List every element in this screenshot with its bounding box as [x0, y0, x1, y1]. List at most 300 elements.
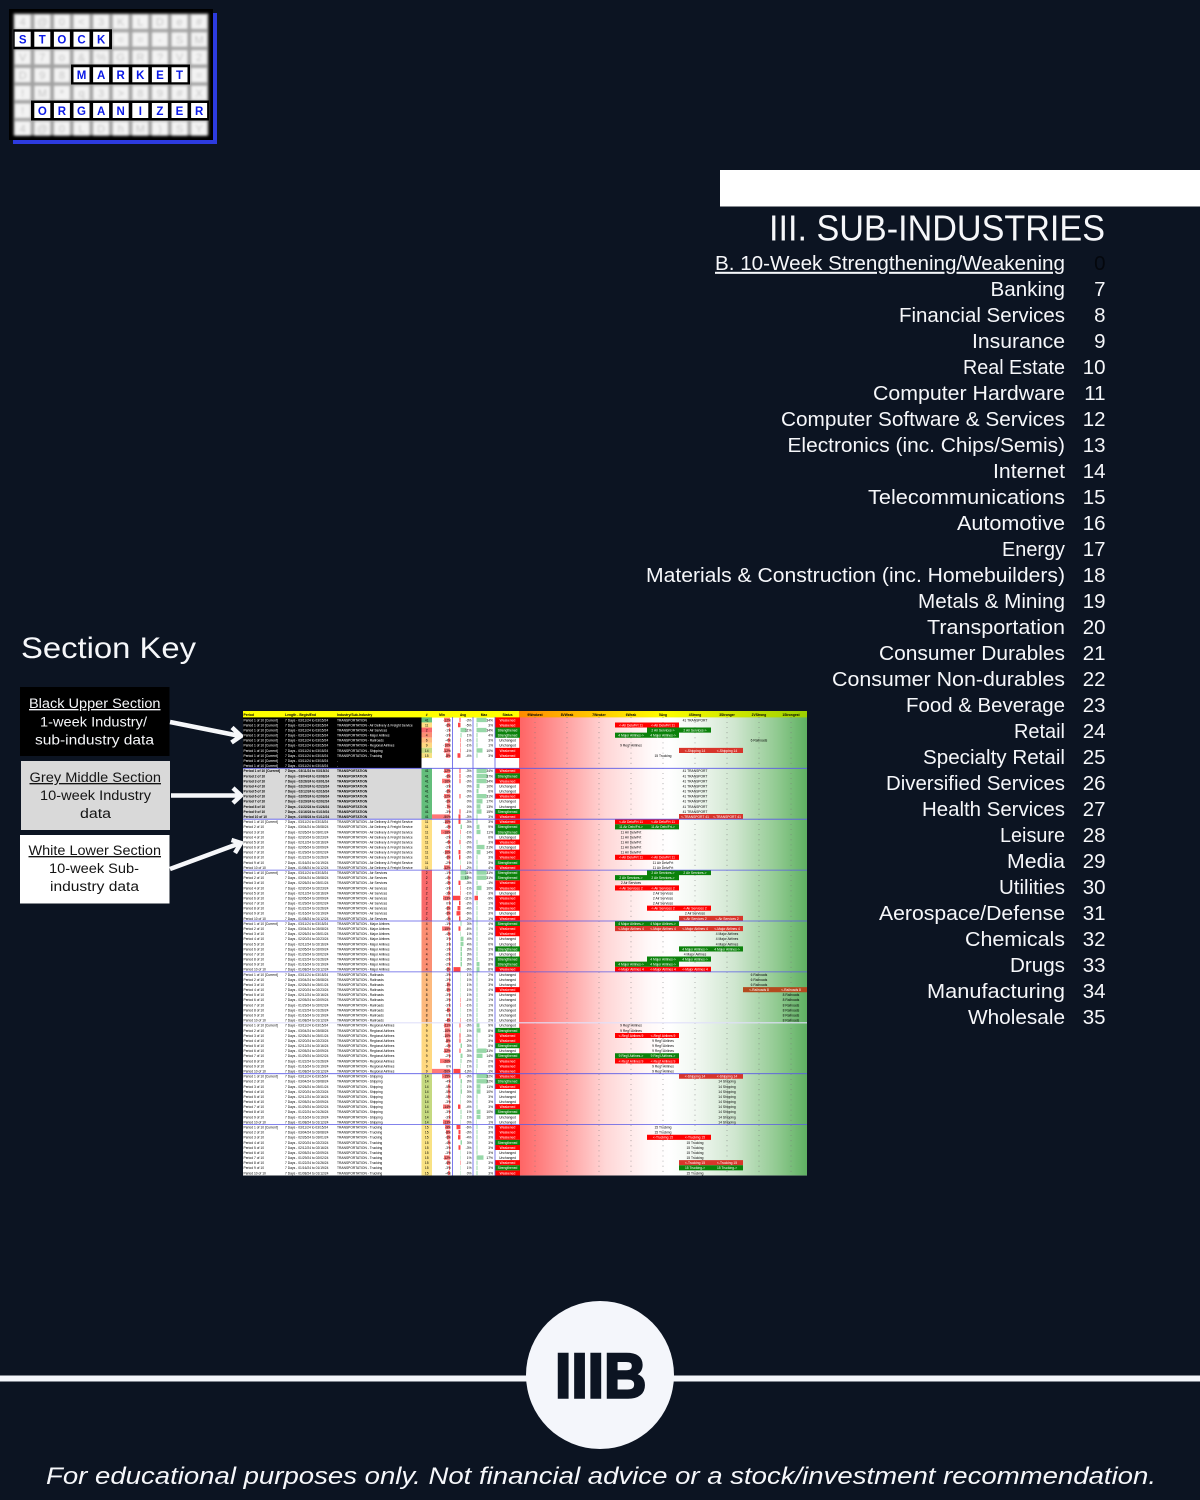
- section: grey middle, 10-week industry data: -6%: [445, 800, 451, 804]
- section: air services: Period 4 of 10: [244, 886, 264, 890]
- section: trucking: Period 3 of 10: [244, 1136, 264, 1140]
- section: black upper, 1-week data: 14: [425, 749, 429, 753]
- section: black upper, 1-week data: -1%: [466, 749, 472, 753]
- section: trucking: Strengthened: [498, 1141, 518, 1145]
- section: air services: TRANSPORTATION - Air Services: [337, 917, 388, 921]
- section: regional airlines: -1%: [487, 1069, 493, 1073]
- section: major airlines: Strengthened: [498, 958, 518, 962]
- table of contents list: Drugs: [1010, 954, 1065, 977]
- section: trucking: Period 1 of 10 [Current]: [244, 1125, 278, 1129]
- section: major airlines: 7 Days - 01/22/24 to 01/26/24: [285, 958, 329, 962]
- section: air services: -4%: [466, 907, 472, 911]
- section: regional airlines: TRANSPORTATION - Regional Airlines: [337, 1029, 395, 1033]
- table of contents list: 8: [1094, 304, 1106, 327]
- section: grey middle, 10-week industry data: TRANSPORTATION: [337, 815, 368, 819]
- section: grey middle, 10-week industry data: TRANSPORTATION: [337, 795, 368, 799]
- section: shipping: 7 Days - 02/26/24 to 03/01/24: [285, 1085, 329, 1089]
- section: major airlines: TRANSPORTATION - Major Airlines: [337, 932, 390, 936]
- section: regional airlines: 9: [426, 1049, 428, 1053]
- section: railroads: 1%: [467, 973, 472, 977]
- section: grey middle, 10-week industry data: Unchanged: [499, 790, 516, 794]
- section: regional airlines: 9: [426, 1059, 428, 1063]
- section: black upper, 1-week data: 41: [425, 718, 429, 722]
- section: grey middle, 10-week industry data: Unchanged: [499, 805, 516, 809]
- section: major airlines: 7 Days - 03/04/24 to 03/08/24: [285, 927, 329, 931]
- section: air delivery and freight: TRANSPORTATION - Air Delivery & Freight Service: [337, 830, 413, 834]
- section: trucking: 15: [425, 1131, 429, 1135]
- section: railroads: Period 9 of 10: [244, 1014, 264, 1018]
- section: railroads: Weakened: [500, 988, 516, 992]
- section: shipping: Period 6 of 10: [244, 1100, 264, 1104]
- section: black upper, 1-week data: 7 Days - 03/11/24 to 03/15/24: [285, 759, 328, 763]
- section: major airlines: TRANSPORTATION - Major Airlines: [337, 942, 390, 946]
- section: major airlines: 4 Major Airlines->: [650, 958, 676, 962]
- section: regional airlines: 7 Days - 03/04/24 to 03/08/24: [285, 1029, 329, 1033]
- section: railroads: TRANSPORTATION - Railroads: [337, 1003, 384, 1007]
- section: major airlines: 4: [426, 968, 428, 972]
- section: grey middle, 10-week industry data: 10%: [486, 784, 493, 788]
- section: grey middle, 10-week industry data: TRANSPORTATION: [337, 769, 368, 773]
- section: air delivery and freight: 3%: [467, 825, 472, 829]
- section: shipping: 0%: [467, 1100, 472, 1104]
- section: air services: Period 8 of 10: [244, 907, 264, 911]
- section: black upper, 1-week data: 2 Air Services->: [683, 729, 707, 733]
- section: railroads: 6: [426, 983, 428, 987]
- section: regional airlines: -3%: [466, 1024, 472, 1028]
- section: trucking: -8%: [445, 1131, 451, 1135]
- section: air services: 7 Days - 01/29/24 to 02/02/24: [285, 902, 329, 906]
- section: trucking: 1%: [467, 1166, 472, 1170]
- section: air services: <-Air Services 2: [651, 886, 675, 890]
- section: major airlines: Period 4 of 10: [244, 937, 264, 941]
- section: trucking: Weakened: [500, 1136, 516, 1140]
- table of contents list: Banking: [990, 278, 1065, 301]
- section: air delivery and freight: Period 10 of 10: [244, 866, 266, 870]
- section: trucking: TRANSPORTATION - Trucking: [337, 1136, 382, 1140]
- section: major airlines: 4 Major Airlines: [716, 937, 739, 941]
- section: shipping: 14 Shipping: [718, 1095, 736, 1099]
- section: major airlines: Unchanged: [499, 952, 516, 956]
- section: grey middle, 10-week industry data: -3%: [466, 815, 472, 819]
- section: railroads: 2%: [488, 1008, 493, 1012]
- section: air services: <-Air Services 2: [651, 907, 675, 911]
- section: trucking: 17%: [486, 1156, 493, 1160]
- table header row: 2VStrong: [752, 713, 766, 717]
- section: air delivery and freight: 7 Days - 01/08/24 to 01/12/24: [285, 866, 329, 870]
- section: air services: Period 5 of 10: [244, 891, 264, 895]
- section: air services: -2%: [466, 902, 472, 906]
- section: major airlines: <-Major Airlines 4: [618, 927, 644, 931]
- section: air services: 0%: [446, 902, 451, 906]
- section: major airlines: Period 5 of 10: [244, 942, 264, 946]
- section: regional airlines: TRANSPORTATION - Regional Airlines: [337, 1054, 395, 1058]
- section: trucking: 1%: [467, 1151, 472, 1155]
- section: black upper, 1-week data: Strengthened: [498, 734, 518, 738]
- section: railroads: -3%: [445, 973, 451, 977]
- section: major airlines: 4 Major Airlines->: [714, 947, 740, 951]
- section: air delivery and freight: Weakened: [500, 866, 516, 870]
- table header row: Max: [481, 713, 487, 717]
- section: black upper, 1-week data: Period 1 of 10 [Current]: [244, 734, 278, 738]
- section: regional airlines: 7 Days - 02/12/24 to 02/16/24: [285, 1044, 329, 1048]
- section: grey middle, 10-week industry data: TRANSPORTATION: [337, 779, 368, 783]
- section: grey middle, 10-week industry data: 7 Days - 02/05/24 to 02/09/24: [285, 795, 329, 799]
- section: air delivery and freight: 7 Days - 02/12/24 to 02/16/24: [285, 840, 329, 844]
- section: major airlines: 4 Major Airlines->: [618, 963, 644, 967]
- section: shipping: 14: [425, 1100, 429, 1104]
- section: grey middle, 10-week industry data: -3%: [466, 774, 472, 778]
- section: railroads: 7 Days - 02/12/24 to 02/16/24: [285, 993, 329, 997]
- section: air delivery and freight: -3%: [466, 856, 472, 860]
- section: railroads: Unchanged: [499, 1003, 516, 1007]
- section: major airlines: TRANSPORTATION - Major Airlines: [337, 963, 390, 967]
- section: railroads: 7 Days - 01/16/24 to 01/19/24: [285, 1014, 329, 1018]
- table of contents list: Leisure: [1000, 824, 1065, 847]
- section: major airlines: 3%: [467, 963, 472, 967]
- section: railroads: -3%: [445, 998, 451, 1002]
- section: shipping: TRANSPORTATION - Shipping: [337, 1110, 383, 1114]
- section: air delivery and freight: 11: [425, 835, 429, 839]
- table header row: Period: [244, 713, 254, 717]
- section: air services: TRANSPORTATION - Air Services: [337, 907, 388, 911]
- section: air services: 7 Days - 01/08/24 to 01/12/24: [285, 917, 329, 921]
- section: regional airlines: 3%: [488, 1039, 493, 1043]
- section: trucking: TRANSPORTATION - Trucking: [337, 1171, 382, 1175]
- section: air delivery and freight: Period 2 of 10: [244, 825, 264, 829]
- section: air delivery and freight: 11 Air Delv/Frt: [621, 846, 641, 850]
- section: trucking: 15: [425, 1141, 429, 1145]
- table header row: Avg: [460, 713, 466, 717]
- section: trucking: TRANSPORTATION - Trucking: [337, 1131, 382, 1135]
- section: shipping: Period 5 of 10: [244, 1095, 264, 1099]
- table of contents list: B. 10-Week Strengthening/Weakening: [715, 252, 1065, 275]
- section: air services: 3%: [488, 891, 493, 895]
- section: black upper, 1-week data: TRANSPORTATION - Regional Airlines: [337, 744, 395, 748]
- section: grey middle, 10-week industry data: 7 Days - 01/29/24 to 02/02/24: [285, 800, 329, 804]
- section: shipping: Strengthened: [498, 1110, 518, 1114]
- section: railroads: 7 Days - 02/20/24 to 02/23/24: [285, 988, 329, 992]
- section: regional airlines: Unchanged: [499, 1024, 516, 1028]
- section: regional airlines: TRANSPORTATION - Regional Airlines: [337, 1059, 395, 1063]
- section: air delivery and freight: 21%: [486, 846, 493, 850]
- section: regional airlines: 9: [426, 1039, 428, 1043]
- section: trucking: 7 Days - 01/29/24 to 02/02/24: [285, 1156, 329, 1160]
- section: black upper, 1-week data: Period 1 of 10 [Current]: [244, 749, 278, 753]
- section: air delivery and freight: Strengthened: [498, 861, 518, 865]
- section: shipping: -3%: [445, 1115, 451, 1119]
- table of contents list: Insurance: [972, 330, 1065, 353]
- section: shipping: 1%: [467, 1085, 472, 1089]
- section: air delivery and freight: 11: [425, 856, 429, 860]
- table of contents list: Diversified Services: [886, 772, 1065, 795]
- section: major airlines: 4 Major Airlines->: [650, 922, 676, 926]
- section: railroads: -1%: [466, 1019, 472, 1023]
- section: air services: -1%: [487, 881, 493, 885]
- section: trucking: Weakened: [500, 1171, 516, 1175]
- section: major airlines: <-Major Airlines 4: [682, 968, 708, 972]
- section: major airlines: 8%: [488, 963, 493, 967]
- section: regional airlines: 7 Days - 03/11/24 to 03/15/24: [285, 1024, 328, 1028]
- section: major airlines: -1%: [445, 947, 451, 951]
- arrow: white section to table: [170, 840, 241, 869]
- section: railroads: Unchanged: [499, 998, 516, 1002]
- section: black upper, 1-week data: Period 1 of 10 [Current]: [244, 723, 278, 727]
- section: regional airlines: 9: [426, 1029, 428, 1033]
- section: trucking: Period 6 of 10: [244, 1151, 264, 1155]
- table of contents list: Financial Services: [899, 304, 1065, 327]
- section: air services: Weakened: [500, 901, 516, 905]
- section: trucking: TRANSPORTATION - Trucking: [337, 1141, 382, 1145]
- section: trucking: [244, 1125, 743, 1176]
- section: black upper, 1-week data: -3%: [466, 718, 472, 722]
- section: black upper, 1-week data: 9 Reg'l Airlines: [620, 744, 642, 748]
- section: major airlines: Period 6 of 10: [244, 947, 264, 951]
- section: trucking: TRANSPORTATION - Trucking: [337, 1161, 382, 1165]
- section: regional airlines: 14%: [486, 1054, 493, 1058]
- section: air delivery and freight: Weakened: [500, 856, 516, 860]
- section: major airlines: 7 Days - 01/16/24 to 01/19/24: [285, 963, 329, 967]
- section: black upper, 1-week data: <-Air Delv/Frt 11: [651, 723, 675, 727]
- section: major airlines: <-Major Airlines 4: [650, 968, 676, 972]
- table header row: #: [426, 713, 428, 717]
- arrow: black section to table: [170, 722, 241, 742]
- section: trucking: 15: [425, 1125, 429, 1129]
- table header row: 1Strongest: [782, 713, 801, 717]
- section: shipping: 14: [425, 1085, 429, 1089]
- table of contents list: Energy: [1002, 538, 1066, 561]
- table of contents list: Real Estate: [963, 356, 1065, 379]
- section: trucking: -3%: [445, 1166, 451, 1170]
- section: railroads: -3%: [445, 993, 451, 997]
- section: railroads: -1%: [466, 1003, 472, 1007]
- section: shipping: 3%: [488, 1095, 493, 1099]
- section: air services: 2: [426, 871, 428, 875]
- section: major airlines: 4: [426, 947, 428, 951]
- section: shipping: -3%: [466, 1075, 472, 1079]
- section: major airlines: 4%: [488, 922, 493, 926]
- section: shipping: Weakened: [500, 1105, 516, 1109]
- section: grey middle, 10-week industry data: 41 TRANSPORT: [683, 769, 707, 773]
- section: air delivery and freight: 0%: [467, 835, 472, 839]
- section: major airlines: 4%: [467, 937, 472, 941]
- section: air delivery and freight: 11 Air Delv/Frt: [621, 830, 641, 834]
- section: railroads: Period 1 of 10 [Current]: [244, 973, 278, 977]
- section: regional airlines: 9 Reg'l Airlines: [652, 1049, 674, 1053]
- table of contents list: 22: [1083, 668, 1106, 691]
- key box: grey middle section: Grey Middle Section: [30, 770, 161, 785]
- section: shipping: 0%: [467, 1095, 472, 1099]
- section: major airlines: -9%: [466, 968, 472, 972]
- table of contents list: 29: [1083, 850, 1106, 873]
- section: air delivery and freight: <-Air Delv/Frt 11: [619, 856, 643, 860]
- section: black upper, 1-week data: Unchanged: [499, 739, 516, 743]
- heading: Section Key: Section Key: [21, 632, 196, 665]
- section: major airlines: 4: [426, 963, 428, 967]
- section: railroads: 3%: [488, 983, 493, 987]
- section: major airlines: 3%: [488, 947, 493, 951]
- section: air delivery and freight: Weakened: [500, 820, 516, 824]
- section: railroads: TRANSPORTATION - Railroads: [337, 1008, 384, 1012]
- table of contents list: 13: [1083, 434, 1106, 457]
- section: major airlines: 7 Days - 01/08/24 to 01/12/24: [285, 968, 329, 972]
- section: railroads: -4%: [445, 1019, 451, 1023]
- section: black upper, 1-week data: <-Shipping 14: [717, 749, 737, 753]
- table of contents list: 16: [1083, 512, 1106, 535]
- section: grey middle, 10-week industry data: -1%: [466, 810, 472, 814]
- section: air services: 2: [426, 876, 428, 880]
- section: shipping: Unchanged: [499, 1100, 516, 1104]
- section: major airlines: Period 8 of 10: [244, 958, 264, 962]
- section: shipping: 1%: [488, 1120, 493, 1124]
- section: black upper, 1-week data: 4%: [488, 734, 493, 738]
- section: railroads: Unchanged: [499, 1019, 516, 1023]
- section: major airlines: 3%: [446, 937, 451, 941]
- section: air services: 2%: [488, 907, 493, 911]
- section: black upper, 1-week data: -1%: [466, 744, 472, 748]
- key box: black upper section: 1-week Industry/: [40, 714, 147, 730]
- table of contents list: 23: [1083, 694, 1106, 717]
- section: regional airlines: Period 10 of 10: [244, 1069, 266, 1073]
- section: major airlines: 7 Days - 02/20/24 to 02/23/24: [285, 937, 329, 941]
- section: air services: 2: [426, 896, 428, 900]
- section: air services: 2: [426, 881, 428, 885]
- section: air delivery and freight: Period 8 of 10: [244, 856, 264, 860]
- section: black upper, 1-week data: <-Air Delv/Frt 11: [619, 723, 643, 727]
- section: trucking: 7 Days - 01/08/24 to 01/12/24: [285, 1171, 329, 1175]
- section: shipping: 14 Shipping: [718, 1085, 736, 1089]
- logo: Stock Market Organizer: STOCK: [19, 34, 106, 46]
- section: air delivery and freight: 11 Air Delv/Frt->: [651, 825, 675, 829]
- section: regional airlines: 0%: [446, 1064, 451, 1068]
- section: trucking: -4%: [445, 1171, 451, 1175]
- section: grey middle, 10-week industry data: Period 8 of 10: [244, 805, 265, 809]
- table of contents list: Utilities: [999, 876, 1065, 899]
- section: trucking: 3%: [488, 1146, 493, 1150]
- section: regional airlines: 9 Reg'l Airlines: [652, 1039, 674, 1043]
- section: air services: 7 Days - 01/16/24 to 01/19/24: [285, 912, 329, 916]
- table of contents list: 11: [1084, 382, 1106, 405]
- table header row: 5Avg: [659, 713, 667, 717]
- section: major airlines: Strengthened: [498, 922, 518, 926]
- section: grey middle, 10-week industry data: 7 Days - 02/12/24 to 02/16/24: [285, 790, 329, 794]
- section: railroads: -1%: [466, 998, 472, 1002]
- section: air services: -1%: [466, 886, 472, 890]
- section: air services: 7 Days - 02/05/24 to 02/09/24: [285, 896, 329, 900]
- section: regional airlines: 9: [426, 1034, 428, 1038]
- section: major airlines: TRANSPORTATION - Major Airlines: [337, 958, 390, 962]
- section: major airlines: Period 1 of 10 [Current]: [244, 922, 278, 926]
- section: railroads: <-Railroads 8: [749, 988, 769, 992]
- section: major airlines: 4 Major Airlines->: [682, 947, 708, 951]
- section: air delivery and freight: -2%: [445, 846, 451, 850]
- section: trucking: 15 Trucking->: [717, 1166, 737, 1170]
- section: grey middle, 10-week industry data: TRANSPORTATION: [337, 774, 368, 778]
- section: shipping: 14 Shipping: [718, 1100, 736, 1104]
- section: railroads: 8 Railroads: [783, 998, 800, 1002]
- section: air delivery and freight: -18%: [443, 830, 451, 834]
- section: major airlines: 3%: [467, 958, 472, 962]
- table of contents list: 17: [1083, 538, 1106, 561]
- section: regional airlines: 3%: [467, 1044, 472, 1048]
- section: trucking: <-Trucking 15: [653, 1136, 673, 1140]
- section: grey middle, 10-week industry data: Strengthened: [498, 774, 518, 778]
- table header row: 6Weak: [626, 713, 636, 717]
- section: regional airlines: -11%: [444, 1024, 451, 1028]
- section: grey middle, 10-week industry data: TRANSPORTATION: [337, 810, 368, 814]
- section: trucking: Period 7 of 10: [244, 1156, 264, 1160]
- section: air services: 3%: [488, 912, 493, 916]
- table of contents list: Computer Software & Services: [781, 408, 1065, 431]
- section: major airlines: 4: [426, 942, 428, 946]
- section: black upper, 1-week data: 3%: [488, 754, 493, 758]
- section: black upper, 1-week data: 1%: [488, 744, 493, 748]
- section: shipping: Period 10 of 10: [244, 1120, 266, 1124]
- section: black upper, 1-week data: 7 Days - 03/11/24 to 03/15/24: [285, 739, 328, 743]
- section: railroads: 6: [426, 988, 428, 992]
- section: major airlines: TRANSPORTATION - Major Airlines: [337, 952, 390, 956]
- section: shipping: 7 Days - 02/12/24 to 02/16/24: [285, 1095, 329, 1099]
- section: air services: Weakened: [500, 917, 516, 921]
- section: regional airlines: 1%: [467, 1029, 472, 1033]
- section: air delivery and freight: 9%: [488, 825, 493, 829]
- section: trucking: 3%: [488, 1151, 493, 1155]
- section: grey middle, 10-week industry data: 15%: [486, 810, 493, 814]
- section: major airlines: 3%: [467, 952, 472, 956]
- section: air services: Weakened: [500, 886, 516, 890]
- table header row: Status: [502, 713, 513, 717]
- section: shipping: -13%: [443, 1120, 451, 1124]
- section: trucking: Unchanged: [499, 1151, 516, 1155]
- section: air services: <-Air Services 2: [619, 886, 643, 890]
- section: air delivery and freight: 11: [425, 820, 429, 824]
- section: railroads: 8 Railroads: [783, 1014, 800, 1018]
- table of contents list: 24: [1083, 720, 1106, 743]
- section: railroads: Period 10 of 10: [244, 1019, 266, 1023]
- section: grey middle, 10-week industry data: 41 TRANSPORT: [683, 790, 707, 794]
- section: black upper, 1-week data: TRANSPORTATION - Air Delivery & Freight Service: [337, 723, 413, 727]
- section: shipping: 32%: [486, 1080, 493, 1084]
- section: regional airlines: 3%: [467, 1054, 472, 1058]
- table of contents list: 19: [1083, 590, 1106, 613]
- section: air services: <-Air Services 2: [683, 917, 707, 921]
- key box: grey middle section: [21, 761, 170, 830]
- section: major airlines: -2%: [445, 952, 451, 956]
- section: railroads: 1%: [467, 1008, 472, 1012]
- section: black upper, 1-week data: -10%: [443, 744, 451, 748]
- section: air services: 10%: [486, 886, 493, 890]
- section: shipping: <-Shipping 14: [717, 1075, 737, 1079]
- section: regional airlines: TRANSPORTATION - Regional Airlines: [337, 1069, 395, 1073]
- section: railroads: 1%: [488, 998, 493, 1002]
- section: black upper, 1-week data: -3%: [445, 734, 451, 738]
- logo: Stock Market Organizer: ORGANIZER: [38, 106, 204, 118]
- section: grey middle, 10-week industry data: TRANSPORTATION: [337, 784, 368, 788]
- section: trucking: TRANSPORTATION - Trucking: [337, 1156, 382, 1160]
- section: air delivery and freight: Strengthened: [498, 830, 518, 834]
- section: trucking: TRANSPORTATION - Trucking: [337, 1146, 382, 1150]
- section: major airlines: 0%: [488, 937, 493, 941]
- section: regional airlines: 9 Reg'l Airlines->: [619, 1054, 643, 1058]
- table of contents list: [646, 252, 1106, 1029]
- section: black upper, 1-week data: 7 Days - 03/11/24 to 03/15/24: [285, 744, 328, 748]
- section: air delivery and freight: 11: [425, 830, 429, 834]
- section: major airlines: 4 Major Airlines: [716, 942, 739, 946]
- section: railroads: TRANSPORTATION - Railroads: [337, 1014, 384, 1018]
- section: trucking: 15 Trucking: [686, 1141, 704, 1145]
- section: grey middle, 10-week industry data: 7 Days - 03/04/24 to 03/08/24: [285, 774, 329, 778]
- section: black upper, 1-week data: -: [337, 764, 338, 768]
- section: air delivery and freight: 11%: [487, 830, 493, 834]
